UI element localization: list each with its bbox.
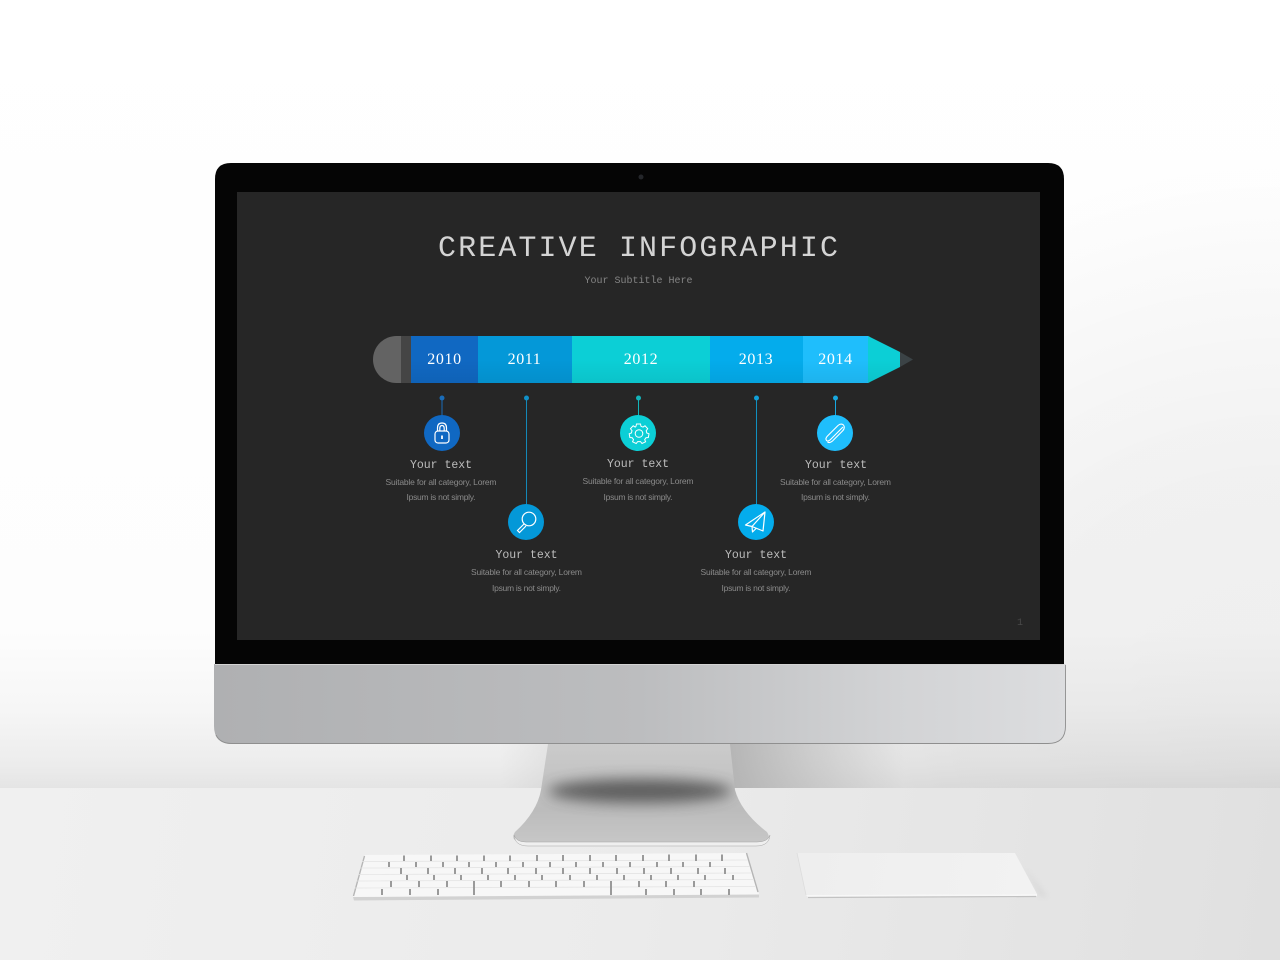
segment 2013 [710,336,803,383]
milestone 2012 [582,396,694,502]
connector [756,398,758,505]
description: Ipsum is not simply. [492,583,561,593]
label: Your text [725,549,787,562]
description: Ipsum is not simply. [801,492,870,502]
description: Ipsum is not simply. [406,492,476,502]
pencil tip lead [900,352,913,367]
year 2014: 2014 [818,351,853,368]
connector [638,398,640,416]
year 2012: 2012 [624,351,658,368]
icon: gear [629,424,649,444]
pencil tip wood [868,336,902,383]
description: Suitable for all category, Lorem [780,477,891,487]
description [700,567,812,593]
key rows [355,860,756,888]
circle badge [508,504,544,540]
circle badge [424,415,460,451]
circle badge [817,415,853,451]
milestone 2014 [780,396,891,502]
segment 2011 [478,336,572,383]
subtitle: Your Subtitle Here [584,275,693,287]
pencil timeline bar [373,336,913,383]
trackpad [797,853,1048,898]
connector [834,398,836,416]
connector [526,398,528,505]
monitor chin [214,664,1066,744]
keyboard [353,853,759,900]
label: Your text [607,458,669,471]
description [386,477,496,502]
icon: paper plane [746,512,765,532]
segment 2012 [572,336,710,383]
key gaps [382,854,733,895]
icon: padlock [435,423,449,443]
description [471,567,582,593]
milestone 2010 [386,396,496,502]
circle badge [738,504,774,540]
year 2013: 2013 [739,351,773,368]
description: Suitable for all category, Lorem [700,567,812,577]
icon: paperclip [826,424,844,443]
description: Suitable for all category, Lorem [386,477,496,487]
screen: slide [237,192,1040,640]
milestone 2011 [471,396,582,593]
camera [638,174,644,180]
connector [441,398,443,416]
segment 2014 [803,336,870,383]
year 2010: 2010 [427,351,462,368]
stand shadow on wall [730,744,905,788]
icon: magnifier [518,512,536,532]
year 2011: 2011 [508,351,541,368]
eraser [373,336,401,383]
label: Your text [495,549,558,562]
slide number: 1 [1017,618,1023,629]
monitor body [215,163,1064,664]
description: Ipsum is not simply. [604,492,672,502]
desk surface [0,788,1280,960]
label: Your text [805,459,867,472]
description: Ipsum is not simply. [722,583,790,593]
circle badge [620,415,656,451]
segment 2010 [411,336,478,383]
label: Your text [410,459,472,472]
description [780,477,891,502]
monitor [214,163,1066,846]
description [582,476,694,502]
monitor stand [513,744,770,846]
title: CREATIVE INFOGRAPHIC [438,232,838,266]
ferrule [401,336,411,383]
description: Suitable for all category, Lorem [582,476,694,486]
description: Suitable for all category, Lorem [471,567,582,577]
milestone 2013 [700,396,812,593]
